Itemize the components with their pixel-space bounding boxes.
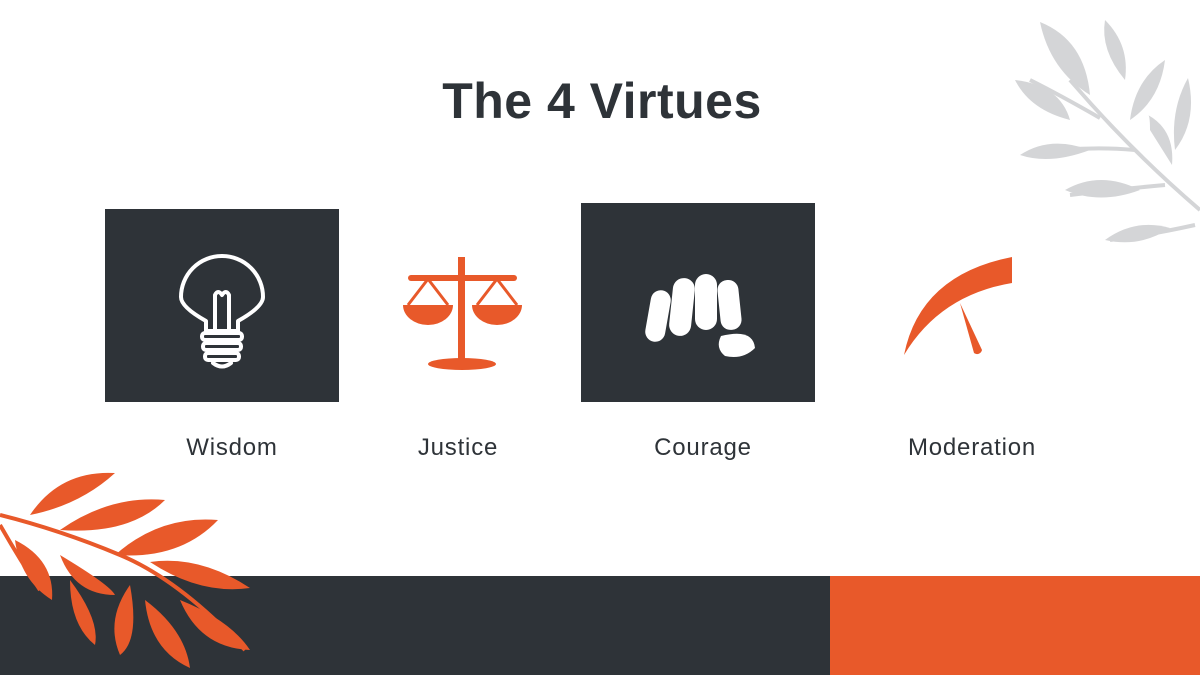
label: moderation: Moderation — [908, 434, 1036, 461]
decoration: orange branch — [0, 472, 250, 668]
panel: wisdom icon box — [105, 209, 339, 402]
icon: light bulb — [179, 254, 265, 368]
label: justice: Justice — [418, 434, 498, 461]
icon: moderation gauge — [904, 257, 1012, 355]
label: courage: Courage — [654, 434, 752, 461]
panel: courage icon box — [581, 203, 815, 402]
bottom bar dark — [0, 576, 830, 675]
icon: justice scales — [403, 257, 522, 370]
bottom bar orange — [830, 576, 1200, 675]
title: The 4 Virtues — [442, 73, 762, 129]
icon: fist — [645, 274, 755, 357]
decoration: grey branch — [1015, 20, 1200, 242]
label: wisdom: Wisdom — [186, 434, 278, 461]
